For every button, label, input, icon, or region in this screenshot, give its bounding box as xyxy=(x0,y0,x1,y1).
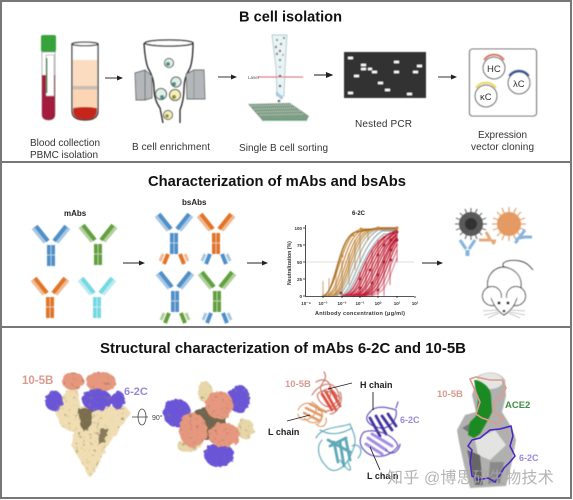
caption: expression: Expression xyxy=(478,130,527,141)
caption: PBMC isolation: PBMC isolation xyxy=(30,150,98,161)
label: H chain: H chain xyxy=(360,380,393,390)
arrow xyxy=(123,262,144,264)
group: mAb antibodies xyxy=(32,225,116,318)
y axis ticks: 100 xyxy=(294,226,302,231)
icon: gray virus xyxy=(455,208,487,240)
arrow xyxy=(105,77,122,79)
chart title: 6-2C xyxy=(352,211,366,217)
caption: blood collection: Blood collection xyxy=(30,138,100,149)
x axis ticks: 10¹ xyxy=(394,301,401,306)
red curves xyxy=(342,230,397,296)
y axis ticks xyxy=(294,226,302,299)
label: HC: HC xyxy=(487,64,501,75)
heading: structural characterization: Structural characterization of mAbs 6-2C and 10-5B xyxy=(100,340,466,357)
divider xyxy=(1,326,571,328)
caption: single B cell sorting: Single B cell sorting xyxy=(239,143,328,154)
orange light chain ribbon xyxy=(298,402,326,426)
label: bsAbs: bsAbs xyxy=(182,198,207,207)
x axis ticks: 10⁰ xyxy=(375,301,382,306)
50 percent reference line xyxy=(305,261,414,263)
axes xyxy=(303,225,415,298)
ACE2 footprint xyxy=(468,380,492,438)
group: bispecific antibodies xyxy=(156,214,235,323)
panel: characterization xyxy=(32,173,533,323)
watermark: 知乎 @博思研生物技术 xyxy=(387,469,554,487)
purple fabs xyxy=(45,389,125,411)
pink fabs xyxy=(62,372,116,392)
divider xyxy=(1,161,571,163)
caption: B cell enrichment: B cell enrichment xyxy=(132,142,210,153)
caption: vector cloning: vector cloning xyxy=(471,142,534,153)
label: 6-2C surface: 6-2C xyxy=(519,453,539,463)
icon: orange virus xyxy=(492,207,526,241)
y axis ticks: 0 xyxy=(299,294,302,299)
y axis ticks: 25 xyxy=(297,277,302,282)
label: laser: Laser xyxy=(248,75,260,80)
icon: PCR gel xyxy=(344,52,426,98)
label: ACE2: ACE2 xyxy=(505,400,530,411)
label: mAbs: mAbs xyxy=(64,209,87,218)
icon: 90 degree rotation xyxy=(132,409,148,425)
ribbon model xyxy=(298,372,400,470)
panel: structural characterization xyxy=(22,340,539,488)
caption: nested PCR: Nested PCR xyxy=(355,119,412,130)
pink heavy chain ribbon xyxy=(312,372,341,414)
x axis ticks: 10⁻³ xyxy=(319,301,328,306)
gray surface xyxy=(457,373,516,488)
icon: blood collection tube xyxy=(41,35,56,120)
heading: characterization: Characterization of mAbs and bsAbs xyxy=(148,173,406,190)
label: 6-2C ribbon: 6-2C xyxy=(400,415,420,425)
y axis title: Neutralization (%) xyxy=(287,241,293,285)
icon: mouse xyxy=(482,260,533,318)
icon: magnetic B cell enrichment xyxy=(135,40,205,123)
label: 90 degrees: 90° xyxy=(152,414,163,422)
icon: single B cell sorter xyxy=(248,35,309,120)
x axis ticks: 10⁻² xyxy=(338,301,347,306)
chart: neutralization curves xyxy=(287,211,419,317)
label: L chain left: L chain xyxy=(268,427,299,437)
label: kappa C: κC xyxy=(480,92,492,103)
arrow xyxy=(314,74,332,76)
purple ribbon xyxy=(360,402,400,456)
surface model xyxy=(457,373,516,488)
arrow xyxy=(422,262,442,264)
x axis title: Antibody concentration (μg/ml) xyxy=(315,311,405,317)
arrow xyxy=(218,76,236,78)
icon: expression vectors xyxy=(470,49,536,116)
6-2C outline xyxy=(468,426,515,482)
arrow xyxy=(247,262,267,264)
y axis ticks: 50 xyxy=(297,260,302,265)
spike body xyxy=(55,390,131,478)
heading: B cell isolation: B cell isolation xyxy=(239,8,342,26)
spike side view xyxy=(45,372,131,478)
x axis ticks xyxy=(301,301,419,306)
icon: PBMC gradient tube xyxy=(72,42,98,120)
label: 6-2C: 6-2C xyxy=(124,386,148,398)
spike top view xyxy=(163,381,254,467)
label: 10-5B: 10-5B xyxy=(22,375,53,387)
panel: B cell isolation xyxy=(30,8,536,161)
icon: neutralizing antibodies xyxy=(460,230,532,256)
label: L chain bottom: L chain xyxy=(367,471,398,481)
purple fabs xyxy=(163,385,250,467)
orange curves xyxy=(322,228,397,296)
x axis ticks: 10² xyxy=(412,301,419,306)
cyan ribbon xyxy=(316,424,361,470)
y axis ticks: 75 xyxy=(297,243,302,248)
label: 10-5B ribbon: 10-5B xyxy=(285,379,311,390)
arrow xyxy=(438,76,456,78)
leader lines xyxy=(287,383,380,470)
tan core xyxy=(177,381,254,452)
label: 10-5B surface: 10-5B xyxy=(437,389,463,400)
error bars and data points xyxy=(323,227,398,296)
x axis ticks: 10⁻¹ xyxy=(356,301,365,306)
x axis ticks: 10⁻⁴ xyxy=(301,301,311,306)
10-5B outline xyxy=(470,377,506,424)
pink fabs xyxy=(179,391,240,447)
label: lambda C: λC xyxy=(513,79,525,90)
